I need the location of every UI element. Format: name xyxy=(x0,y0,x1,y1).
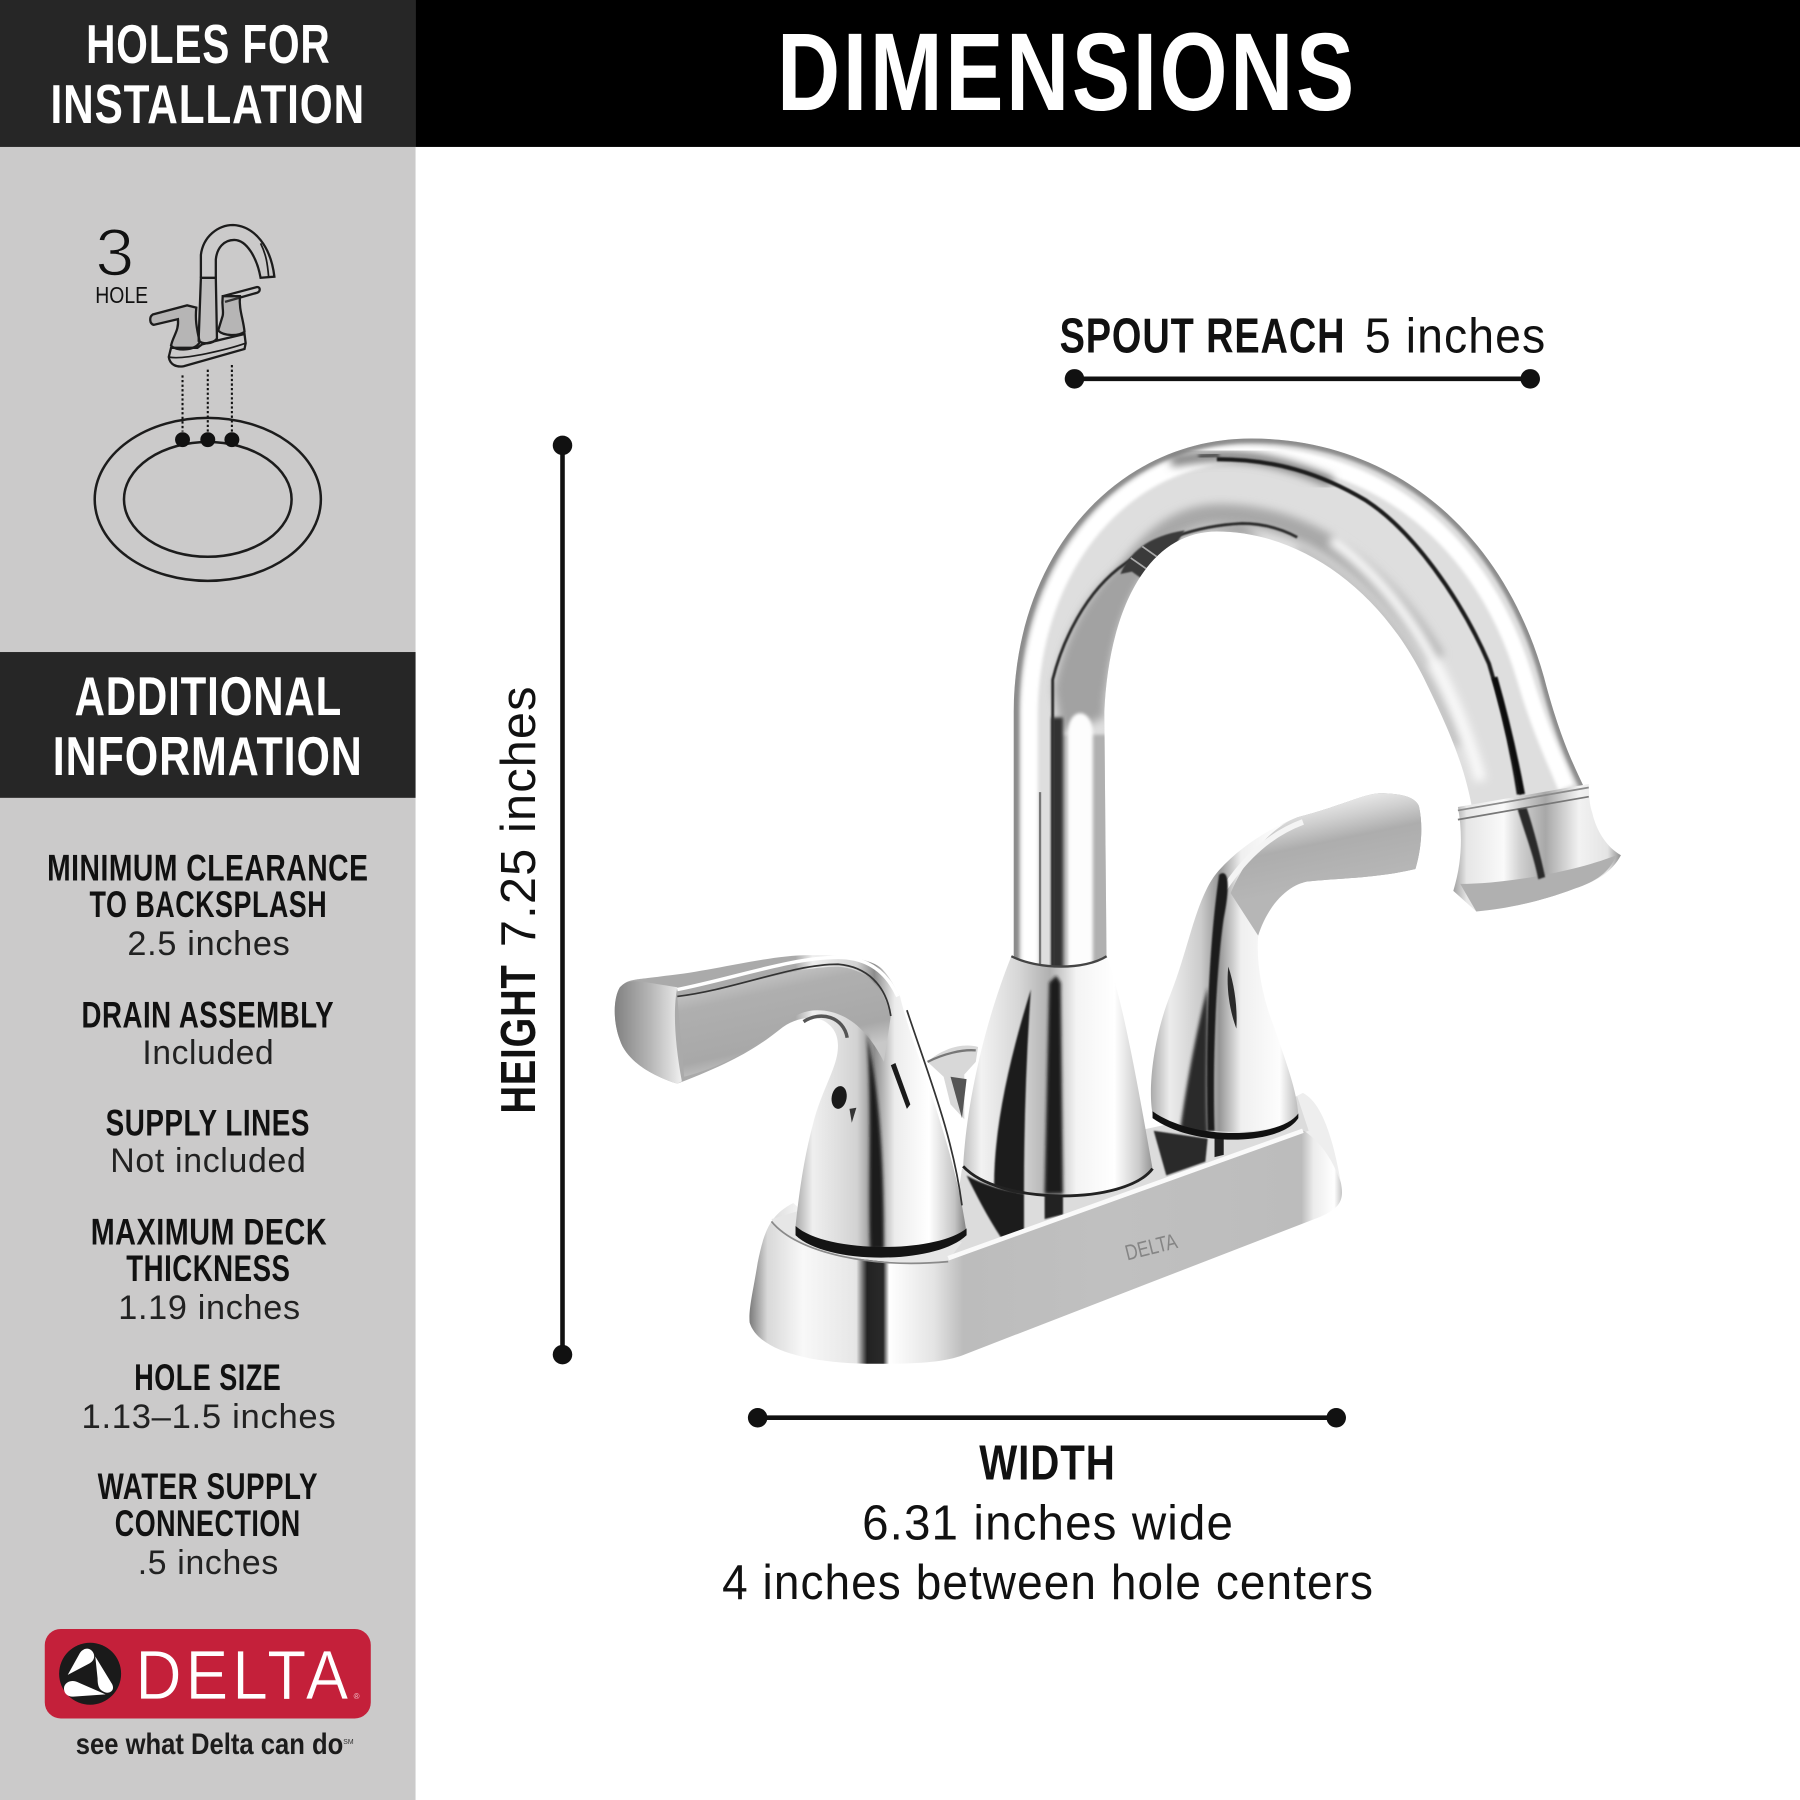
spec: drain assembly: Included xyxy=(142,1034,274,1072)
spec: maximum deck thickness: MAXIMUM DECK xyxy=(91,1211,327,1252)
tagline: see what Delta can do xyxy=(76,1728,343,1761)
header: holes for installation: INSTALLATION xyxy=(51,73,365,135)
panel: left sidebar xyxy=(0,0,416,1800)
logo: delta: ® xyxy=(354,1692,360,1701)
dimension: height: 7.25 inches xyxy=(491,685,546,947)
dimension: spout reach: 5 inches xyxy=(1365,308,1546,363)
spec: hole size: 1.13–1.5 inches xyxy=(82,1398,336,1436)
spec: water supply connection: .5 inches xyxy=(138,1544,279,1582)
spec: water supply connection: CONNECTION xyxy=(115,1503,301,1544)
spec: water supply connection: WATER SUPPLY xyxy=(98,1466,318,1507)
spec: minimum clearance: MINIMUM CLEARANCE xyxy=(47,847,368,888)
spec: maximum deck thickness xyxy=(91,1211,327,1327)
dimension: width: 4 inches between hole centers xyxy=(722,1555,1374,1610)
spec: supply lines: SUPPLY LINES xyxy=(106,1102,310,1143)
icon: three hole faucet over sink: 3 xyxy=(95,217,134,291)
soft gray inner band xyxy=(1091,514,1435,689)
dimension: width xyxy=(722,1408,1374,1610)
spec: maximum deck thickness: THICKNESS xyxy=(126,1248,290,1289)
header: holes for installation: HOLES FOR xyxy=(86,13,331,75)
aerator xyxy=(1453,784,1621,911)
dimension: spout reach: SPOUT REACH xyxy=(1060,308,1345,363)
icon: three hole faucet over sink xyxy=(95,217,321,581)
left reflection panel xyxy=(1054,523,1263,735)
logo: delta: DELTA xyxy=(135,1636,352,1714)
spout xyxy=(1014,438,1583,966)
upper soft dark reflection xyxy=(1171,456,1332,482)
spec: drain assembly: DRAIN ASSEMBLY xyxy=(82,994,334,1035)
spec: minimum clearance xyxy=(47,847,368,963)
outer edge shading xyxy=(1015,439,1584,970)
center body xyxy=(963,956,1153,1196)
spec: minimum clearance: 2.5 inches xyxy=(127,925,290,963)
deck logo: DELTA xyxy=(1122,1228,1180,1265)
header: holes for installation xyxy=(0,0,416,147)
spec: water supply connection xyxy=(98,1466,318,1582)
spec: supply lines: Not included xyxy=(110,1142,307,1180)
dark reflection line right xyxy=(1217,459,1519,794)
dimension: width: WIDTH xyxy=(979,1436,1116,1491)
dimension: height: HEIGHT xyxy=(491,964,546,1114)
tagline: SM xyxy=(343,1739,354,1746)
spec: hole size xyxy=(82,1357,336,1436)
dimension: spout reach xyxy=(1060,308,1546,389)
spec: hole size: HOLE SIZE xyxy=(134,1357,281,1398)
lift rod xyxy=(928,1046,978,1119)
header: additional information: INFORMATION xyxy=(53,725,363,787)
icon: three hole faucet over sink: HOLE xyxy=(95,282,148,308)
dark reflection patch xyxy=(1120,530,1185,583)
deck top surface behind bodies xyxy=(948,1093,1341,1260)
header: dimensions: DIMENSIONS xyxy=(777,11,1357,134)
spec: supply lines xyxy=(106,1102,310,1180)
left handle xyxy=(615,955,967,1258)
logo: delta xyxy=(45,1629,371,1718)
header: dimensions xyxy=(416,0,1800,147)
right handle xyxy=(1151,793,1421,1140)
dimension: height xyxy=(491,436,572,1364)
spec: maximum deck thickness: 1.19 inches xyxy=(118,1289,301,1327)
faucet illustration xyxy=(615,425,1621,1364)
header: additional information: ADDITIONAL xyxy=(75,665,342,727)
dimension: width: 6.31 inches wide xyxy=(862,1495,1234,1550)
header: additional information xyxy=(0,652,416,798)
spec: drain assembly xyxy=(82,994,334,1072)
deck plate front xyxy=(749,1131,1342,1364)
spec: minimum clearance: TO BACKSPLASH xyxy=(90,884,327,925)
